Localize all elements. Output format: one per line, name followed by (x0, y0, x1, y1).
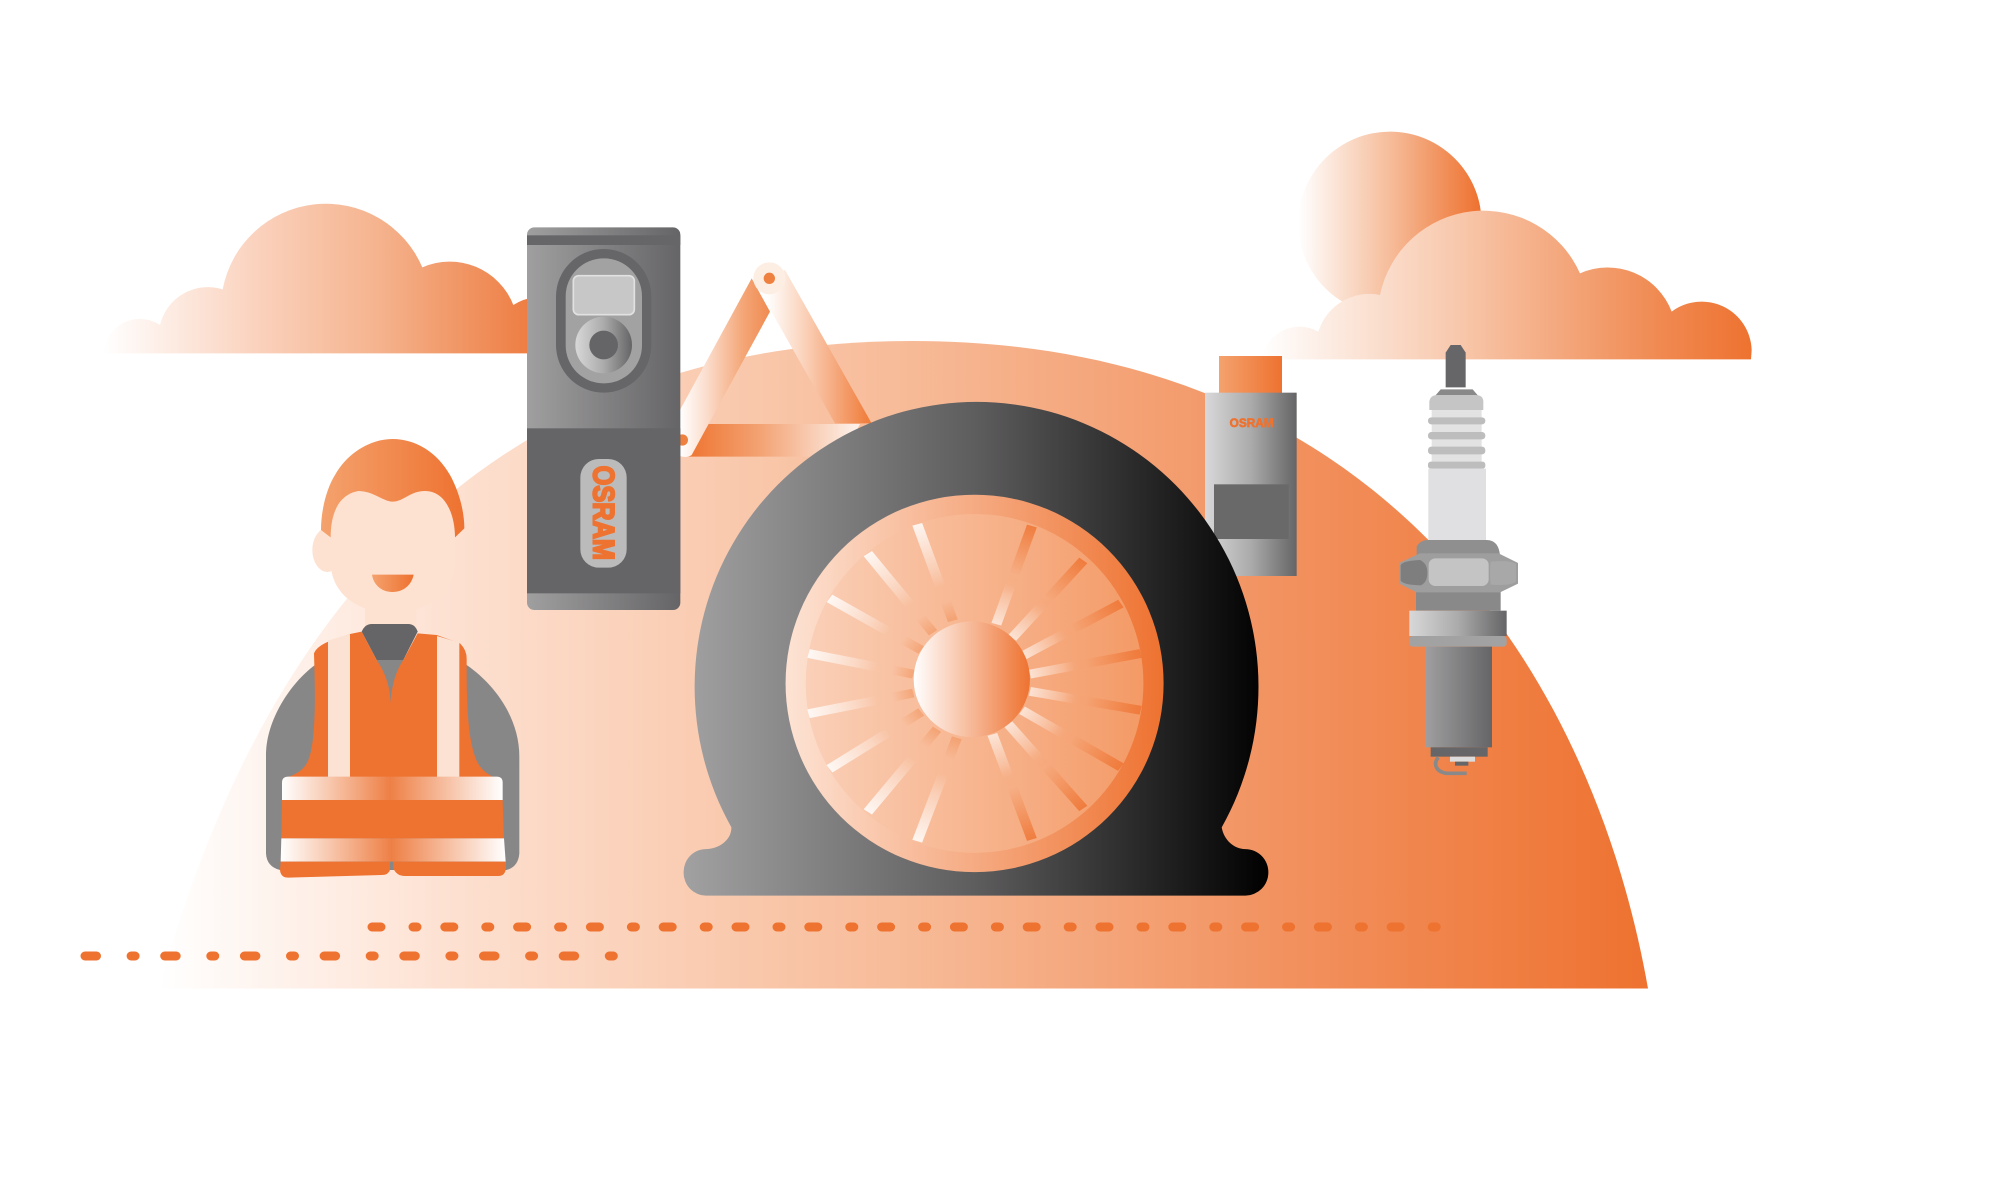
road dashes (85, 927, 1445, 956)
device control panel (566, 258, 642, 383)
device lower panel (527, 428, 680, 593)
device top strip (527, 235, 680, 245)
vest left stripe (328, 634, 350, 778)
vest upper reflective band (282, 777, 503, 800)
worker hair (321, 439, 464, 537)
can label (1214, 484, 1289, 539)
worker mouth (372, 575, 414, 592)
triangle base bar (683, 424, 860, 457)
plug hex nut (1400, 554, 1517, 592)
plug tip (1431, 747, 1488, 757)
triangle top joint (753, 262, 785, 294)
worker arms and torso (266, 665, 519, 870)
plug neck (1416, 590, 1501, 611)
device logo text: OSRAM (586, 466, 619, 560)
spark plug (1400, 345, 1517, 773)
plug insulator ribs (1428, 395, 1485, 472)
plug washer base (1409, 636, 1507, 647)
right cloud (1262, 211, 1752, 359)
device shell (527, 227, 680, 610)
worker shirt (377, 660, 403, 703)
triangle right leg (753, 270, 872, 423)
hill background (159, 341, 1648, 988)
plug terminal (1446, 345, 1466, 387)
vest middle band (281, 800, 504, 838)
device logo badge (580, 459, 627, 568)
flat tire (684, 402, 1268, 896)
worker collar (362, 624, 418, 660)
worker face (331, 488, 455, 613)
plug lower insulator (1428, 469, 1486, 541)
device screen (573, 276, 634, 315)
vest hem (280, 862, 506, 878)
vest body (283, 632, 497, 778)
tire casing (684, 402, 1268, 896)
oil can (1205, 356, 1297, 576)
warning triangle (677, 262, 872, 457)
worker in safety vest (266, 439, 519, 878)
plug shoulder (1417, 540, 1500, 555)
lower dashed line (85, 952, 616, 960)
vest lower reflective band (281, 838, 506, 862)
wheel hub (914, 621, 1030, 737)
plug barrel (1425, 647, 1492, 747)
wheel disc (806, 514, 1143, 853)
air compressor device (527, 227, 680, 610)
triangle lower joint (677, 434, 688, 446)
can body (1205, 393, 1297, 576)
sun behind right cloud (1298, 132, 1482, 315)
triangle left leg (680, 278, 770, 457)
device control surround (556, 249, 651, 393)
plug electrode (1436, 757, 1475, 773)
worker neck (365, 607, 417, 637)
worker left ear (312, 528, 342, 572)
can cap (1219, 356, 1282, 393)
device dial (575, 317, 632, 373)
plug collar (1435, 389, 1478, 396)
plug washer (1409, 611, 1507, 636)
upper dashed line (372, 922, 1445, 932)
can brand text: OSRAM (1230, 416, 1274, 430)
wheel spokes (809, 514, 1141, 851)
vest right stripe (437, 636, 459, 778)
left cloud (103, 204, 557, 353)
wheel rim (786, 495, 1164, 872)
